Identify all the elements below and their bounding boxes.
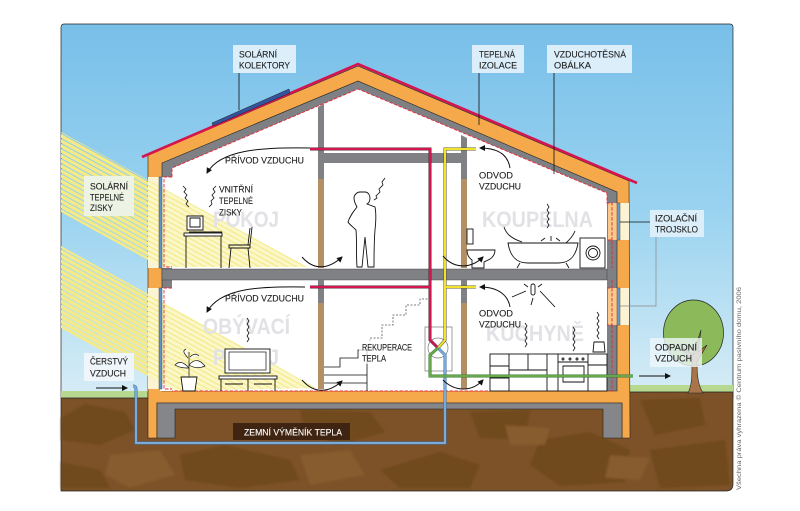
label: solární tepelné zisky: TEPELNÉ [90,192,124,202]
floor slab [162,269,607,280]
label: solární kolektory [233,45,296,110]
icon: kitchen units [490,354,607,391]
airtight envelope [164,89,612,391]
icon: computer desk [184,216,222,268]
icon: bath [504,227,578,268]
sky background [61,24,733,400]
label: vnitřní tepelné zisky: VNITŘNÍ [219,184,253,194]
roof covering [142,64,637,183]
interior [172,89,607,391]
label: vzduchotěsná obálka: VZDUCHOTĚSNÁ [554,50,626,60]
label: izolační trojsklo: IZOLAČNÍ [655,214,697,224]
icon: toilet [467,229,495,268]
heat exchanger unit [425,327,452,371]
label: odvod vzduchu lower: VZDUCHU [479,320,521,330]
label: čerstvý vzduch: VZDUCH [90,368,126,378]
label: odpadní vzduch [650,338,702,367]
label: rekuperace tepla [359,340,415,364]
label: vzduchotěsná obálka [547,45,632,174]
structural layer [162,81,617,391]
attic ceiling [318,153,467,163]
label: odvod vzduchu lower [479,308,521,330]
room name: obývací pokoj [203,314,291,370]
foundation [157,403,622,438]
label: vzduchotěsná obálka: OBÁLKA [554,60,591,70]
north windows [608,203,629,325]
label: čerstvý vzduch: ČERSTVÝ [90,356,128,366]
label: solární tepelné zisky: ZISKY [90,203,113,213]
room name: kuchyně: KUCHYNĚ [486,321,584,346]
label: vnitřní tepelné zisky: ZISKY [219,208,242,218]
label: odpadní vzduch: VZDUCH [655,354,692,364]
label: tepelná izolace: IZOLACE [479,60,517,70]
label: solární tepelné zisky: SOLÁRNÍ [90,182,128,192]
label: tepelná izolace: TEPELNÁ [479,50,515,60]
house shell: thermal insulation [148,66,630,438]
icon: kettle [593,342,605,352]
label: odvod vzduchu upper [479,170,521,192]
label: vnitřní tepelné zisky [219,184,253,218]
credit: Všechna práva vyhrazena © Centrum pasivního domu, 2006 [736,286,743,490]
icon: chair [229,227,252,268]
label: přívod vzduchu upper: PŘÍVOD VZDUCHU [225,156,304,166]
tree [664,300,724,393]
glazing [159,177,162,389]
solar gain rays [61,132,316,391]
icon: person [348,192,376,267]
partition walls [318,104,467,389]
room name: obývací pokoj: POKOJ [213,345,279,370]
south windows [148,177,172,391]
arrows: air flow [96,148,670,390]
internal heat gain squiggles [183,178,599,351]
label: izolační trojsklo: TROJSKLO [655,224,698,234]
label: odvod vzduchu upper: VZDUCHU [479,182,521,192]
room name: koupelna: KOUPELNA [482,207,593,232]
label: vnitřní tepelné zisky: TEPELNÉ [219,196,253,206]
solar collector [212,89,290,126]
label: odpadní vzduch: ODPADNÍ [655,342,698,352]
label: přívod vzduchu lower: PŘÍVOD VZDUCHU [225,294,304,304]
label: solární kolektory: SOLÁRNÍ [239,50,277,60]
icon: washing machine [580,238,605,268]
label: zemní výměník tepla [233,423,350,440]
room name: pokoj: POKOJ [213,207,279,232]
icon: ceiling lamp [512,284,555,307]
label: rekuperace tepla: TEPLA [362,354,386,364]
duct: supply air (red) [310,149,438,348]
label: čerstvý vzduch [84,353,134,381]
label: rekuperace tepla: REKUPERACE [362,342,412,352]
label: odvod vzduchu upper: ODVOD [479,170,514,180]
ground [61,392,733,491]
label: zemní výměník tepla: ZEMNÍ VÝMĚNÍK TEPLA [244,428,342,438]
label: odvod vzduchu lower: ODVOD [479,308,514,318]
icon: television [219,349,277,391]
duct: waste air (green) [430,348,633,376]
label: solární kolektory: KOLEKTORY [239,60,290,70]
room name: obývací pokoj: OBÝVACÍ [203,314,291,339]
label: izolační trojsklo [620,210,704,306]
duct: fresh air (blue) [133,348,445,443]
label: solární tepelné zisky [84,176,134,216]
stairs [324,299,430,391]
duct: extract air (yellow) [438,149,476,348]
grass [61,385,733,399]
icon: plant [175,349,205,391]
label: tepelná izolace [472,45,524,125]
